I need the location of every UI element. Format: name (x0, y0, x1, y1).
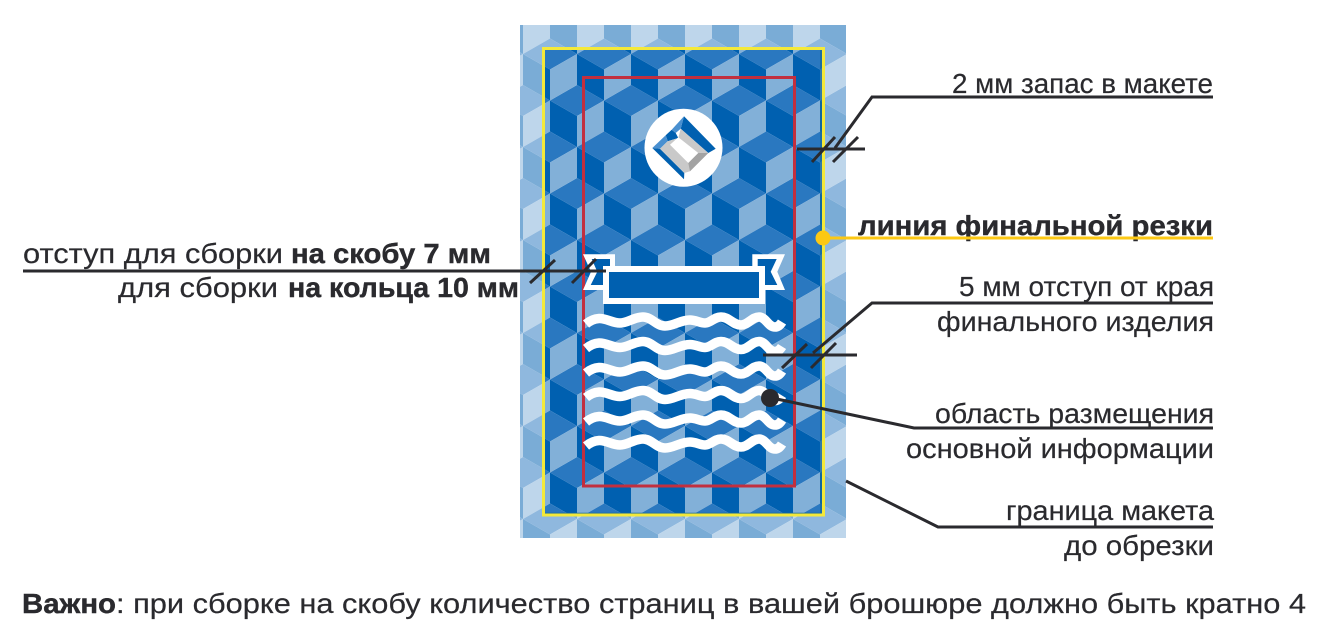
cube pattern background (520, 25, 846, 538)
icon: ribbon banner (583, 254, 785, 301)
callout: 5 mm margin: финального изделия (937, 306, 1214, 337)
bleed area overlay (520, 25, 846, 538)
callout: layout border before trimming (846, 481, 1214, 561)
callout: binding margin: отступ для сборки (23, 238, 283, 269)
callout: 2 mm bleed: 2 мм запас в макете (952, 68, 1213, 99)
callout: 2 mm bleed (797, 68, 1213, 162)
callout: layout border before trimming: до обрезки (1064, 530, 1214, 561)
callout: 5 mm margin: 5 мм отступ от края (959, 271, 1214, 302)
callout: 5 mm margin (763, 271, 1214, 368)
callout: final cut line: линия финальной резки (858, 210, 1213, 241)
callout: binding margin: на кольца 10 мм (288, 272, 519, 303)
callout: main information area (761, 389, 1214, 464)
final cut line frame (544, 48, 824, 515)
callout: layout border before trimming: граница макета (1006, 495, 1214, 526)
callout: main information area: основной информации (906, 433, 1214, 464)
safe margin frame (584, 78, 794, 486)
important note: Важно (22, 588, 116, 619)
wavy text placeholder lines (586, 317, 782, 449)
inner edge strip (544, 49, 821, 514)
callout: main information area: область размещения (935, 398, 1214, 429)
panel: brochure layout (520, 25, 846, 538)
callout: binding margin: для сборки (118, 272, 278, 303)
icon: logo (644, 109, 722, 187)
callout: binding margin: на скобу 7 мм (291, 238, 491, 269)
callout: binding margin (23, 238, 606, 303)
important note: : при сборке на скобу количество страниц в вашей брошюре должно быть кратно 4 (116, 588, 1306, 619)
